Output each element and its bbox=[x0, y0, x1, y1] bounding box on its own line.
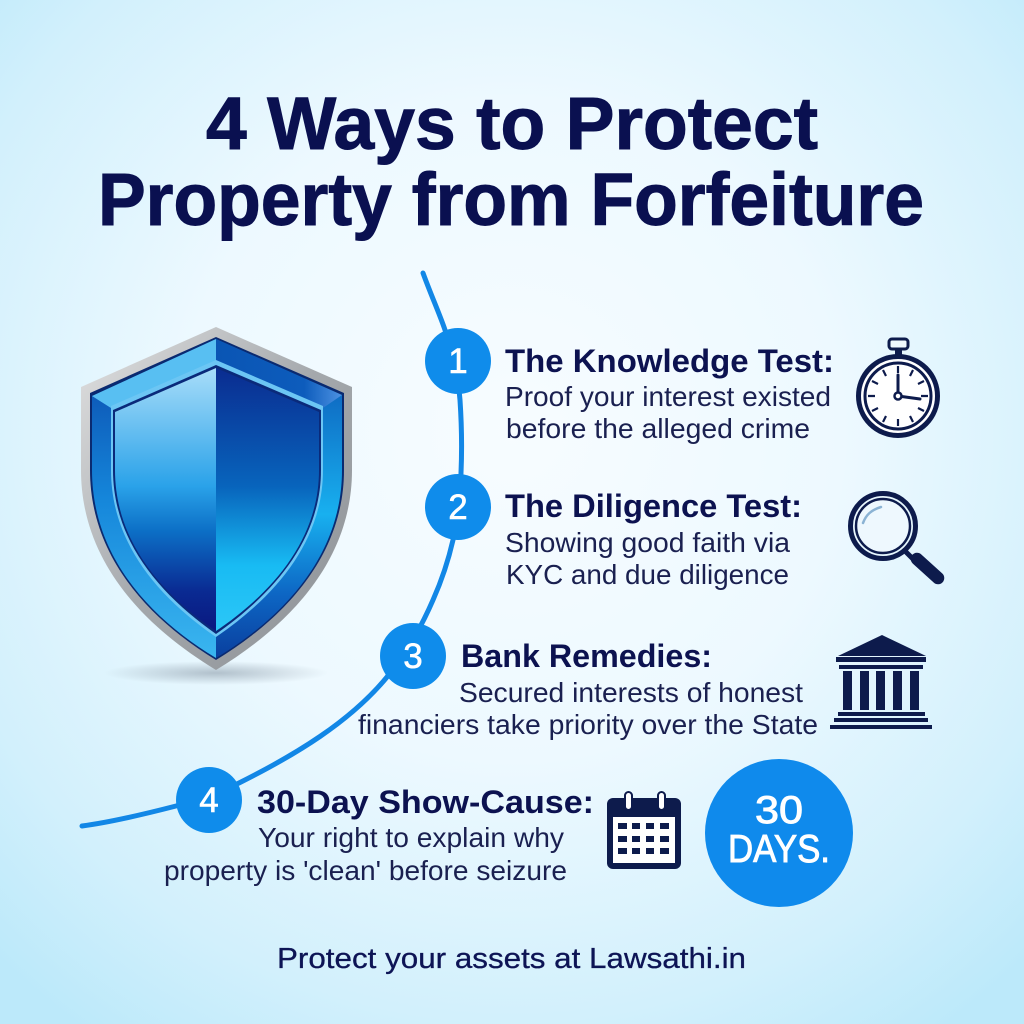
body 3: Secured interests of honest bbox=[459, 677, 803, 708]
footer: Protect your assets at Lawsathi.in bbox=[277, 943, 746, 975]
badge 4: 4 bbox=[199, 781, 219, 820]
step 1 bbox=[425, 328, 834, 444]
icon: bank building bbox=[830, 635, 932, 729]
title: Property from Forfeiture bbox=[98, 158, 924, 241]
body 1: Proof your interest existed bbox=[505, 381, 831, 412]
heading 4: 30-Day Show-Cause: bbox=[257, 784, 594, 820]
title: 4 Ways to Protect bbox=[206, 82, 818, 165]
step 3 bbox=[358, 623, 818, 740]
badge: 30 days bbox=[705, 759, 853, 907]
badge 3: 3 bbox=[403, 637, 423, 676]
timeline curve bbox=[82, 273, 462, 826]
title bbox=[98, 82, 924, 241]
badge 3 bbox=[380, 623, 446, 689]
badge 1 bbox=[425, 328, 491, 394]
heading 1: The Knowledge Test: bbox=[505, 343, 834, 379]
badge 4 bbox=[176, 767, 242, 833]
icon: magnifying glass bbox=[850, 494, 938, 578]
step 2 bbox=[425, 474, 802, 590]
body 3 bbox=[358, 677, 818, 740]
body 4 bbox=[164, 822, 567, 886]
heading 3: Bank Remedies: bbox=[461, 638, 712, 674]
body 1 bbox=[505, 381, 831, 444]
body 3: financiers take priority over the State bbox=[358, 709, 818, 740]
body 2 bbox=[505, 527, 790, 590]
badge: 30 days: 30 bbox=[755, 789, 803, 832]
icon: shield bbox=[81, 327, 352, 685]
badge 2: 2 bbox=[448, 488, 468, 527]
badge: 30 days: DAYS. bbox=[728, 828, 830, 871]
step 4 bbox=[164, 767, 594, 886]
icon: calendar bbox=[607, 792, 681, 869]
heading 2: The Diligence Test: bbox=[505, 488, 802, 524]
body 4: Your right to explain why bbox=[258, 822, 564, 853]
icon: stopwatch bbox=[858, 339, 938, 436]
body 1: before the alleged crime bbox=[506, 413, 810, 444]
body 2: KYC and due diligence bbox=[506, 559, 789, 590]
badge 1: 1 bbox=[448, 342, 468, 381]
body 4: property is 'clean' before seizure bbox=[164, 855, 567, 886]
body 2: Showing good faith via bbox=[505, 527, 790, 558]
badge 2 bbox=[425, 474, 491, 540]
